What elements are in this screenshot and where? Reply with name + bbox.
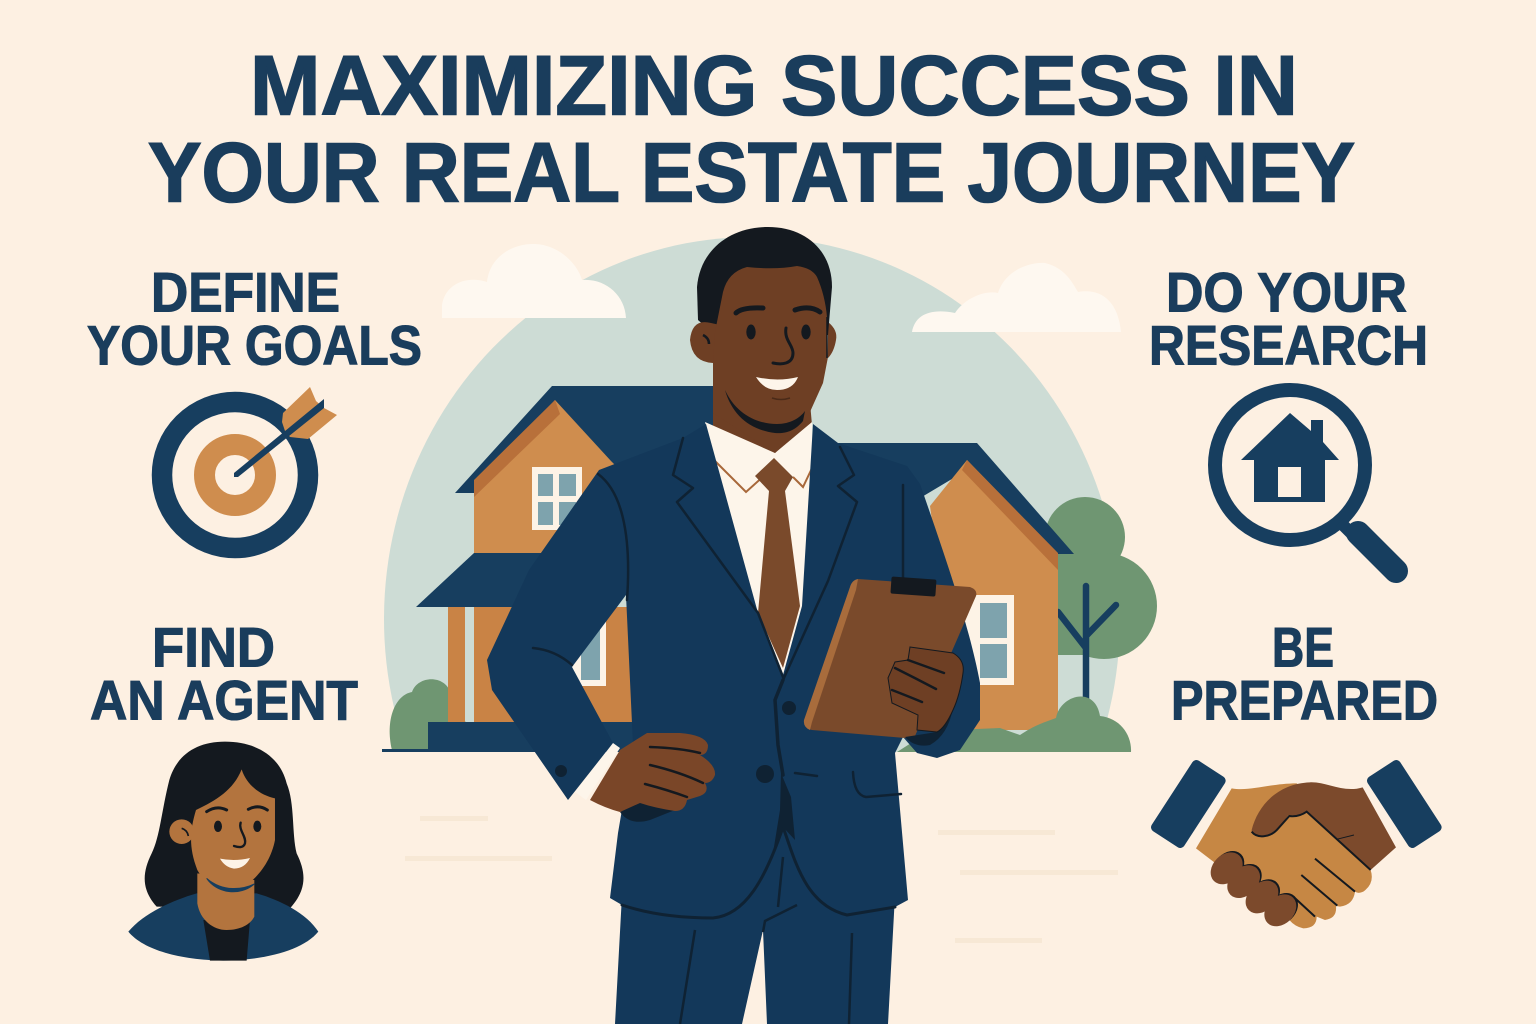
icon: target with arrow <box>162 387 337 548</box>
right wing <box>838 443 1074 554</box>
jacket <box>487 424 980 918</box>
heading: be prepared <box>1171 616 1438 732</box>
clipboard <box>804 576 976 739</box>
man in suit <box>487 227 980 1024</box>
heading: define your goals: YOUR GOALS <box>87 314 422 376</box>
heading: find an agent: AN AGENT <box>90 668 358 732</box>
lower window <box>566 616 606 686</box>
heading: define your goals: DEFINE <box>151 260 340 324</box>
background scene: sky circle <box>384 237 1120 752</box>
shirt <box>705 422 815 680</box>
cloud right <box>912 263 1121 332</box>
head <box>690 227 836 453</box>
neck <box>713 380 812 465</box>
icon: handshake <box>1149 758 1443 933</box>
heading: define your goals <box>87 260 422 376</box>
heading: be prepared: PREPARED <box>1171 668 1438 732</box>
left bush <box>390 679 480 750</box>
eyes and brows <box>746 324 811 340</box>
right window <box>965 595 1014 685</box>
trousers <box>615 815 895 1024</box>
heading: be prepared: BE <box>1272 616 1334 678</box>
tie <box>755 458 800 668</box>
heading: do your research: DO YOUR <box>1166 260 1407 324</box>
tree <box>1045 497 1157 700</box>
heading: do your research: RESEARCH <box>1149 314 1428 376</box>
ground marks <box>405 816 1118 943</box>
jacket lines <box>533 438 903 918</box>
title: MAXIMIZING SUCCESS IN <box>250 38 1298 132</box>
icon: magnifier with house <box>1215 390 1396 571</box>
right bush <box>897 697 1131 752</box>
heading: find an agent <box>90 616 358 732</box>
upper window <box>532 467 582 530</box>
hand holding clipboard <box>888 647 963 746</box>
jacket buttons <box>555 701 796 783</box>
house <box>382 386 1131 752</box>
heading: find an agent: FIND <box>152 616 275 678</box>
icon: agent portrait <box>128 742 318 961</box>
cloud left <box>442 244 626 318</box>
title <box>148 38 1355 220</box>
heading: do your research <box>1149 260 1428 376</box>
title: YOUR REAL ESTATE JOURNEY <box>148 126 1355 220</box>
hand on hip <box>575 733 715 822</box>
